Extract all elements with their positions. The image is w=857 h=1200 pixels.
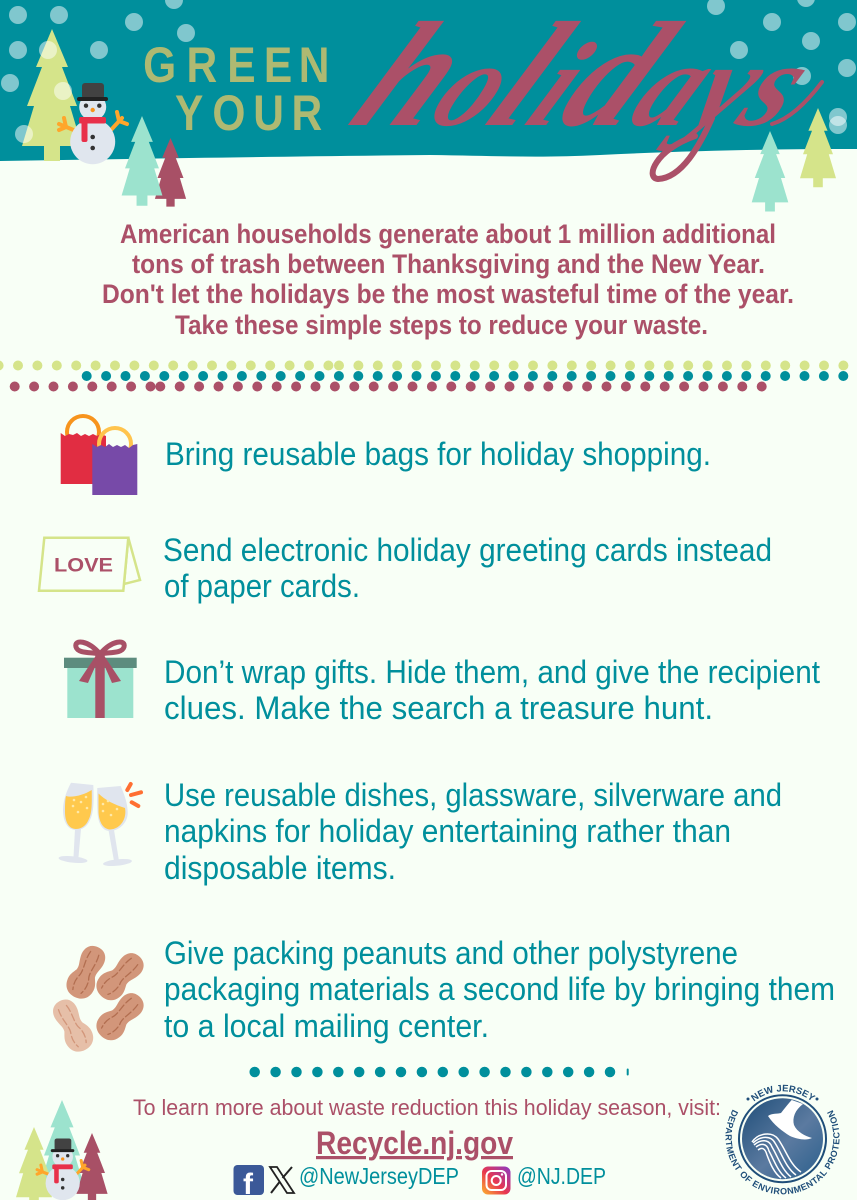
- title: green your: YOUR: [175, 85, 322, 141]
- text: dishes: Use reusable dishes, glassware, silverware and: [164, 777, 782, 813]
- intro text: Don't let the holidays be the most wasteful time of the year.: [102, 279, 794, 309]
- icon: X: [270, 1167, 294, 1193]
- tree: mint header: [122, 116, 162, 206]
- intro text: tons of trash between Thanksgiving and the New Year.: [132, 249, 765, 279]
- text: packing peanuts: Give packing peanuts and other polystyrene: [164, 935, 738, 971]
- text: dishes: napkins for holiday entertaining rather than: [164, 813, 731, 849]
- footer text: To learn more about waste reduction this holiday season, visit:: [133, 1095, 721, 1120]
- text: bags: Bring reusable bags for holiday shopping.: [165, 436, 711, 472]
- handle: x and facebook: @NewJerseyDEP: [299, 1163, 459, 1189]
- icon: love card: LOVE: [54, 556, 113, 576]
- icon: champagne glasses: [58, 783, 141, 867]
- text: dishes: disposable items.: [164, 850, 396, 886]
- footer dotted divider: [255, 1068, 629, 1076]
- text: gifts: clues. Make the search a treasure hunt.: [164, 690, 713, 726]
- footer trees and snowman: [16, 1100, 108, 1200]
- icon: peanuts: [47, 941, 150, 1056]
- icon: gift: [64, 642, 137, 718]
- icon: instagram: [482, 1166, 510, 1194]
- tree: lime header: [22, 29, 82, 161]
- logo: NJ DEP seal: DEPARTMENT OF ENVIRONMENTAL PROTECTION: [726, 1110, 840, 1194]
- dotted divider: [0, 366, 857, 386]
- snowman: header: [59, 83, 127, 164]
- intro text: [102, 219, 794, 340]
- text: gifts: [164, 654, 820, 726]
- logo: NJ DEP seal: NEW JERSEY: [750, 1084, 816, 1102]
- text: dishes: [164, 777, 782, 886]
- text: cards: of paper cards.: [164, 568, 360, 604]
- icon: love card: [39, 538, 140, 591]
- text: gifts: Don’t wrap gifts. Hide them, and give the recipient: [164, 654, 820, 690]
- snowflakes: [1, 0, 856, 143]
- text: packing peanuts: [164, 935, 835, 1044]
- intro text: Take these simple steps to reduce your waste.: [175, 310, 708, 340]
- icon: facebook: [234, 1165, 264, 1200]
- text: cards: [163, 532, 772, 604]
- intro text: American households generate about 1 million additional: [120, 219, 776, 249]
- text: cards: Send electronic holiday greeting cards instead: [163, 532, 772, 568]
- title: green your: [143, 37, 329, 141]
- title: green your: GREEN: [143, 37, 329, 93]
- link: Recycle.nj.gov: [316, 1125, 513, 1161]
- header banner: [0, 0, 857, 161]
- icon: shopping bags: [61, 416, 137, 495]
- text: packing peanuts: to a local mailing center.: [164, 1008, 489, 1044]
- tree: maroon header: [155, 138, 186, 207]
- handle: instagram: @NJ.DEP: [517, 1163, 606, 1189]
- tree: mint right: [752, 131, 788, 212]
- tree: lime right: [800, 108, 836, 187]
